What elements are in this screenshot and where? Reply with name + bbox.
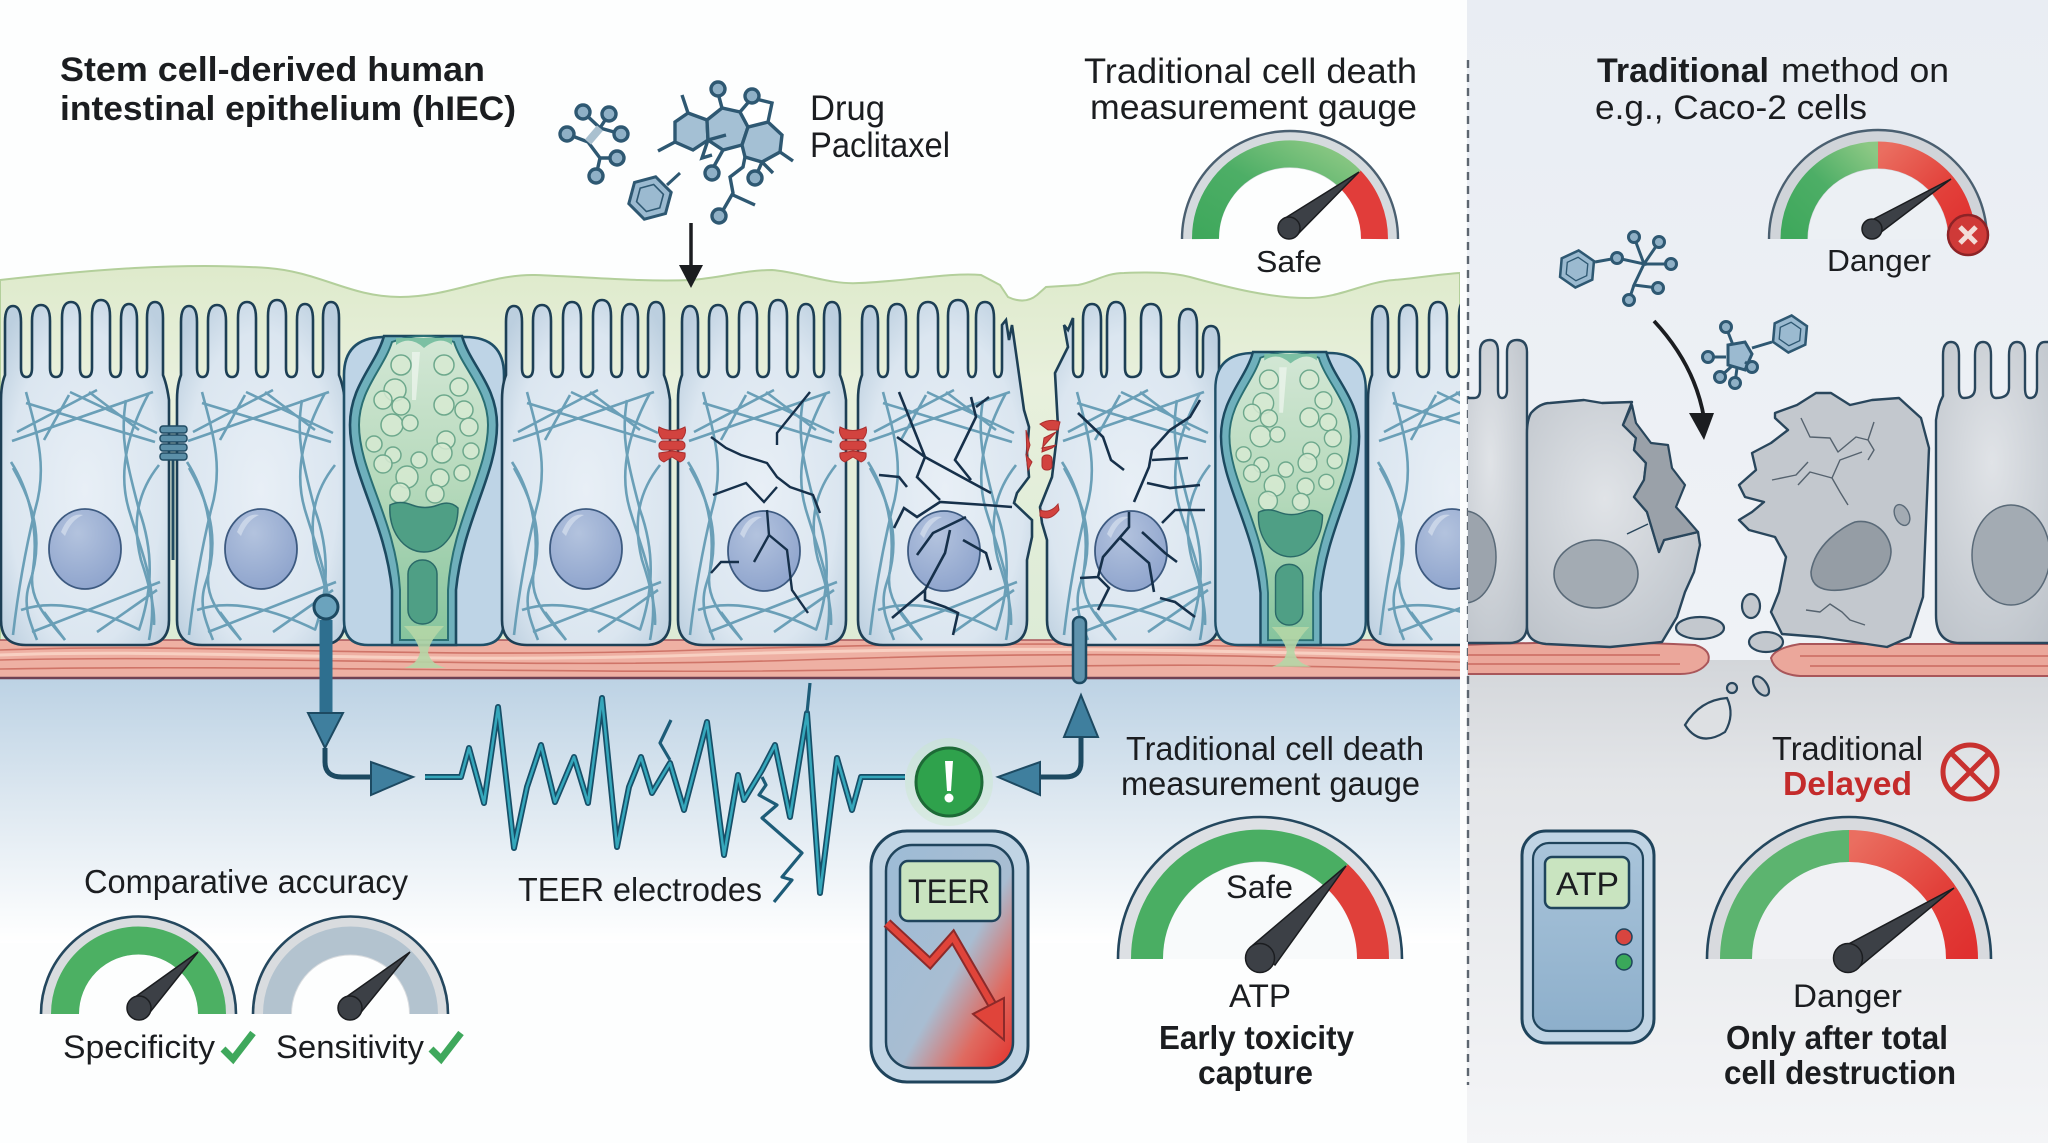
right healthy grey cell — [1936, 342, 2048, 643]
callout: only after total cell destruction: cell destruction — [1724, 1054, 1956, 1091]
gauge: ATP danger — [1707, 817, 1991, 1014]
gauge label: Safe — [1256, 244, 1322, 279]
label: TEER electrodes: TEER electrodes — [518, 871, 762, 908]
callout: early toxicity capture: Early toxicity — [1159, 1019, 1355, 1056]
icon: drug molecule cluster — [560, 82, 793, 224]
heading: traditional method: method on — [1781, 52, 1949, 90]
ATP label box: ATP — [1556, 866, 1619, 902]
tight junction: intact blue — [160, 426, 187, 560]
icon: molecule near gap — [1702, 311, 1814, 388]
gauge: danger top — [1769, 130, 1988, 278]
TEER waveform — [425, 683, 905, 902]
callout: early toxicity capture: capture — [1198, 1054, 1313, 1091]
icon: green alert — [905, 738, 993, 826]
gauge label: Danger — [1827, 243, 1931, 278]
damaged cell 4 — [678, 300, 846, 645]
healthy cell 2 — [177, 300, 345, 645]
left partial cell — [1468, 338, 1528, 644]
panel: traditional damaged cells — [1434, 340, 2048, 739]
callout: only after total cell destruction: Only after total — [1726, 1019, 1948, 1056]
ruptured cell A — [1527, 400, 1700, 647]
gauge: safe top — [1182, 131, 1398, 279]
device: TEER meter — [871, 831, 1028, 1082]
goblet cell 1 — [344, 336, 504, 668]
waveform fractures — [660, 683, 810, 902]
label: ATP — [1229, 978, 1291, 1014]
label: traditional delayed: Traditional — [1772, 730, 1923, 767]
gauge: specificity — [41, 917, 253, 1065]
label: Safe — [1226, 869, 1293, 905]
heading: traditional gauge bottom — [1121, 730, 1424, 802]
device: ATP meter — [1522, 831, 1654, 1043]
benzene ring — [626, 172, 680, 224]
membrane left piece — [1460, 642, 1709, 674]
label: traditional delayed — [1772, 730, 1923, 802]
icon: molecule top right — [1553, 232, 1676, 306]
label with check: Specificity — [63, 1029, 215, 1065]
callout: early toxicity capture — [1159, 1019, 1355, 1091]
tight junction: broken — [1026, 420, 1060, 518]
heading: traditional gauge top — [1084, 52, 1417, 127]
heading: traditional gauge bottom: measurement gauge — [1121, 765, 1420, 802]
healthy cell 1 — [1, 300, 169, 645]
mucus layer — [0, 266, 1460, 650]
debris fragments — [1676, 594, 1783, 739]
damaged cell 5 — [858, 300, 1032, 645]
background: lower blue zone — [0, 678, 1460, 943]
gauge: sensitivity — [253, 917, 461, 1065]
paclitaxel structure — [658, 82, 793, 223]
gauge: ATP safe — [1118, 817, 1402, 1014]
heading: traditional method: e.g., Caco-2 cells — [1595, 89, 1867, 127]
heading: comparative accuracy: Comparative accuracy — [84, 863, 408, 900]
heading: traditional gauge top: measurement gauge — [1090, 88, 1417, 127]
healthy cell 7 — [1366, 300, 1460, 646]
heading: traditional method: Traditional — [1597, 52, 1769, 90]
divider: dashed line — [1467, 60, 1469, 1085]
arrow: curved into damaged cells — [1654, 321, 1714, 440]
label with check: Sensitivity — [276, 1029, 424, 1065]
heading: traditional method — [1595, 52, 1949, 127]
tight junction: red stressed — [658, 427, 686, 462]
falling arrow — [887, 923, 1000, 1018]
TEER label box: TEER — [908, 873, 990, 911]
ATP label box — [1545, 857, 1629, 908]
tight junction: red second — [839, 427, 867, 462]
membrane right piece — [1771, 644, 2048, 676]
label: Danger — [1793, 978, 1902, 1014]
electrode: left with arrows — [308, 595, 413, 795]
healthy cell 3 — [502, 300, 670, 645]
label: drug paclitaxel: Drug — [810, 89, 885, 128]
label: drug paclitaxel — [810, 89, 950, 165]
heading: traditional gauge top: Traditional cell death — [1084, 52, 1417, 91]
danger badge — [1948, 215, 1988, 255]
damaged cell 6 — [1040, 302, 1219, 645]
title — [60, 51, 516, 128]
small molecule — [560, 105, 628, 183]
background: right comparison panel — [1467, 0, 2048, 1143]
TEER label box — [900, 861, 1000, 921]
icon: delayed cross — [1943, 745, 1997, 799]
title: intestinal epithelium (hIEC) — [60, 90, 516, 128]
label: drug paclitaxel: Paclitaxel — [810, 126, 950, 165]
callout: only after total cell destruction — [1724, 1019, 1956, 1091]
goblet cell 2 — [1215, 352, 1366, 667]
basement membrane — [0, 640, 1460, 678]
electrode: right with arrows — [998, 617, 1098, 795]
panel: stem cell-derived epithelium — [0, 266, 1536, 678]
background: left panel — [0, 0, 1467, 1143]
heading: traditional gauge bottom: Traditional cell death — [1126, 730, 1424, 767]
arrow: drug into epithelium — [679, 223, 703, 288]
label: traditional delayed: Delayed — [1783, 765, 1912, 802]
title: Stem cell-derived human — [60, 51, 485, 89]
disintegrated cell B — [1739, 393, 1929, 647]
